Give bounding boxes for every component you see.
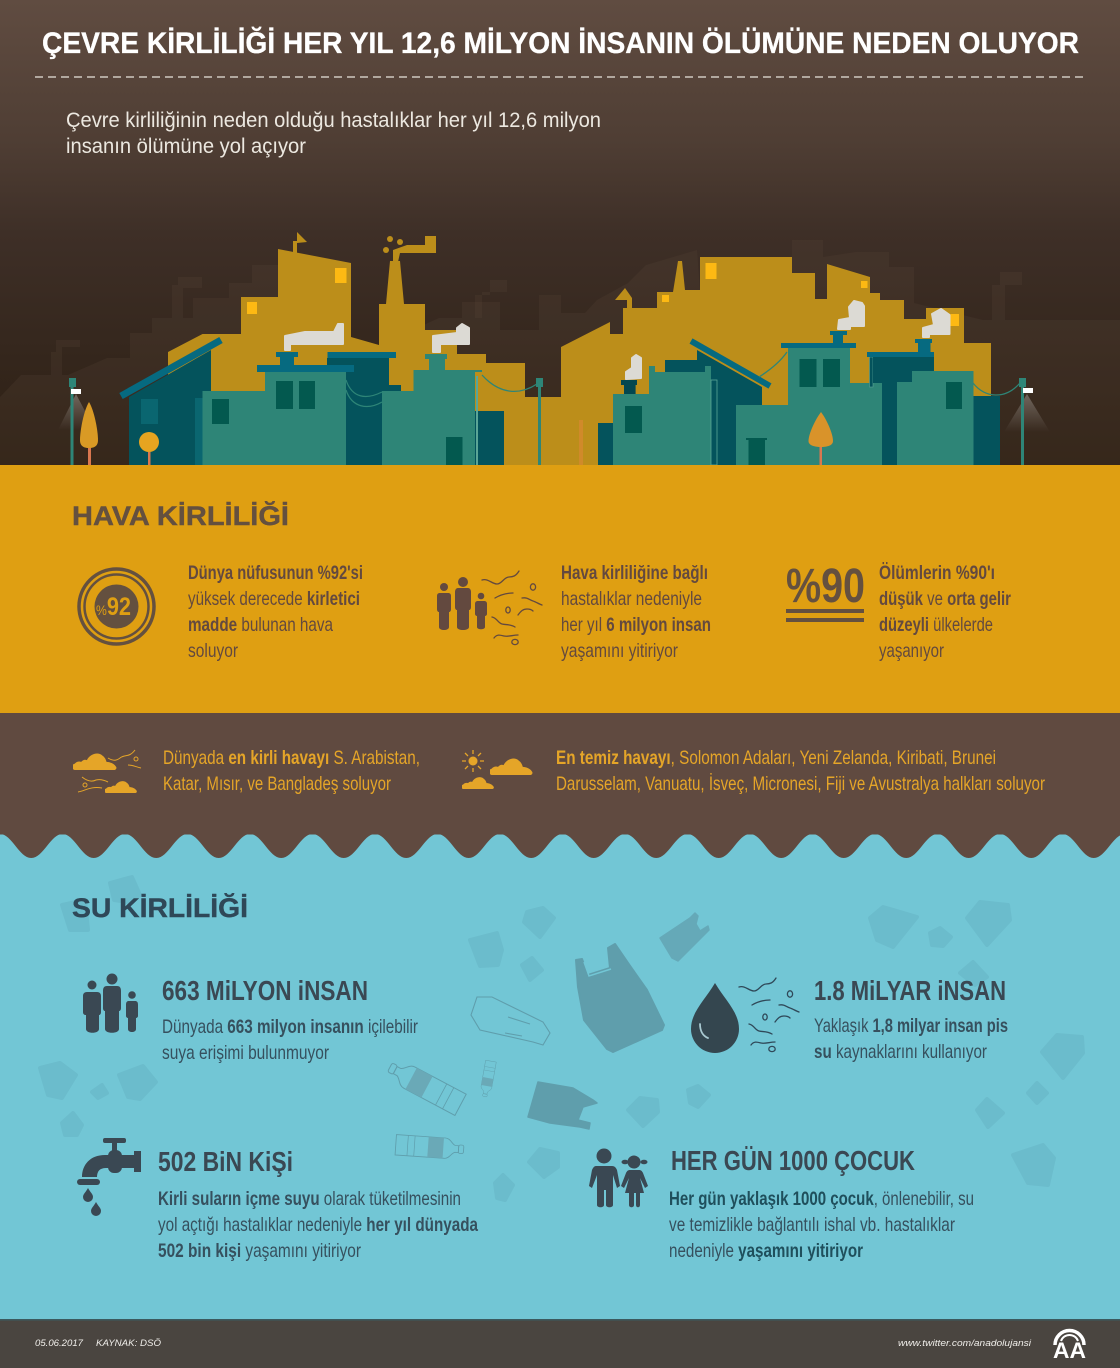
right block [579, 301, 1020, 465]
text block: 6 milyon: hastalıklar nedeniyle [561, 588, 702, 610]
title: ÇEVRE KİRLİLİĞİ HER YIL 12,6 MİLYON İNSANIN ÖLÜMÜNE NEDEN OLUYOR [42, 26, 1079, 60]
text block: Dünyada 663 milyon insanın içilebilir [162, 1016, 418, 1038]
heading: 502 BiN KiŞi [158, 1146, 293, 1177]
text block: %92: Dünya nüfusunun %92'si [188, 562, 363, 584]
text block: dirtiest air: Dünyada en kirli havayı S. Arabistan, [163, 747, 420, 769]
item: 502 bin [77, 1138, 478, 1262]
subtitle: insanın ölümüne yol açıyor [66, 134, 306, 158]
text block: 6 milyon [561, 562, 711, 662]
heading: HER GÜN 1000 ÇOCUK [671, 1145, 915, 1176]
panel: air quality band with wave edge [0, 713, 1120, 858]
twitter address: www.twitter.com/anadolujansi [898, 1338, 1032, 1348]
text block: %92: madde bulunan hava [188, 614, 333, 636]
plastic bag lower [528, 1082, 597, 1129]
bottle 3 [395, 1135, 464, 1160]
plastic bag upper right [660, 913, 709, 961]
text block: su kaynaklarını kullanıyor [814, 1041, 987, 1063]
icon: sun and clean clouds [461, 750, 532, 789]
date and source: 05.06.2017 [35, 1338, 84, 1348]
street lamp left [58, 378, 95, 465]
text block: %92 [188, 562, 363, 662]
item: 663 milyon [83, 974, 418, 1064]
text block: ve temizlikle bağlantılı ishal vb. hastalıklar [669, 1214, 955, 1236]
text block: %90: düşük ve orta gelir [879, 588, 1011, 610]
heading: 1.8 MiLYAR iNSAN [814, 975, 1006, 1006]
heading: hava kirliliği: HAVA KİRLİLİĞİ [72, 500, 289, 531]
text block: 6 milyon: her yıl 6 milyon insan [561, 614, 711, 636]
plastic bag large [576, 944, 664, 1052]
icon: %90: %90 [786, 560, 865, 613]
text block: Yaklaşık 1,8 milyar insan pis [814, 1015, 1008, 1037]
illustration: polluted city skyline [0, 232, 1120, 465]
subtitle: Çevre kirliliğinin neden olduğu hastalıklar her yıl 12,6 milyon [66, 108, 601, 132]
empty bottle outline [471, 997, 550, 1045]
item: 1000 çocuk [589, 1145, 974, 1262]
footer [0, 1319, 1120, 1368]
icon: dirty clouds [72, 750, 141, 793]
text block: 502 bin kişi yaşamını yitiriyor [158, 1240, 361, 1262]
text block: 6 milyon: yaşamını yitiriyor [561, 640, 678, 662]
tree left [80, 402, 98, 465]
text block: dirtiest air [163, 747, 420, 795]
date and source: KAYNAK: DSÖ [96, 1338, 161, 1348]
icon: people [83, 974, 138, 1033]
text block: cleanest air [556, 747, 1045, 795]
water debris: faint rubbish shapes [40, 877, 1083, 1200]
heading: su kirliliği: SU KİRLİLİĞİ [72, 892, 248, 923]
bottle 4 [479, 1060, 496, 1098]
icon: %92 ring: %92 [96, 593, 131, 621]
text block: nedeniyle yaşamını yitiriyor [669, 1240, 863, 1262]
icon: dripping tap [77, 1138, 141, 1216]
date and source [35, 1338, 161, 1348]
panel: air pollution [0, 465, 1120, 713]
text block [162, 1016, 418, 1064]
illustration: plastic bags and bottles [384, 913, 709, 1160]
icon: people breathing polluted air [437, 571, 542, 645]
text block: %90: Ölümlerin %90'ı [879, 561, 995, 584]
text block: %90: düzeyli ülkelerde [879, 614, 993, 636]
text block: %90: yaşanıyor [879, 640, 944, 662]
icon: children [589, 1148, 648, 1207]
icon: %92 ring [79, 569, 154, 644]
left block [121, 324, 543, 465]
text block: Her gün yaklaşık 1000 çocuk, önlenebilir, su [669, 1188, 974, 1210]
background: polluted sky [0, 0, 1120, 466]
panel: water background [0, 830, 1120, 1320]
text block [669, 1188, 974, 1262]
text block: %90 [879, 561, 1011, 662]
text block: 6 milyon: Hava kirliliğine bağlı [561, 562, 708, 584]
text block: %92: yüksek derecede kirletici [188, 588, 360, 610]
icon: dirty water drop [691, 978, 799, 1053]
text block: yol açtığı hastalıklar nedeniyle her yıl dünyada [158, 1214, 478, 1236]
item: 1.8 milyar [691, 975, 1008, 1063]
logo: AA: AA [1053, 1338, 1086, 1363]
round tree [139, 432, 159, 465]
text block: cleanest air: En temiz havayı, Solomon Adaları, Yeni Zelanda, Kiribati, Brunei [556, 747, 996, 769]
lit windows [247, 263, 959, 326]
bottle 2 [384, 1057, 466, 1115]
gold buildings [168, 249, 991, 465]
text block: suya erişimi bulunmuyor [162, 1042, 329, 1064]
text block [814, 1015, 1008, 1063]
text block: dirtiest air: Katar, Mısır, ve Bangladeş soluyor [163, 773, 391, 795]
text block: Kirli suların içme suyu olarak tüketilmesinin [158, 1188, 461, 1210]
text block: %92: soluyor [188, 640, 238, 662]
text block [158, 1188, 478, 1262]
street lamp right [1004, 378, 1050, 465]
subtitle [66, 108, 601, 158]
distant ghost buildings [0, 240, 1120, 465]
heading: 663 MiLYON iNSAN [162, 975, 368, 1006]
